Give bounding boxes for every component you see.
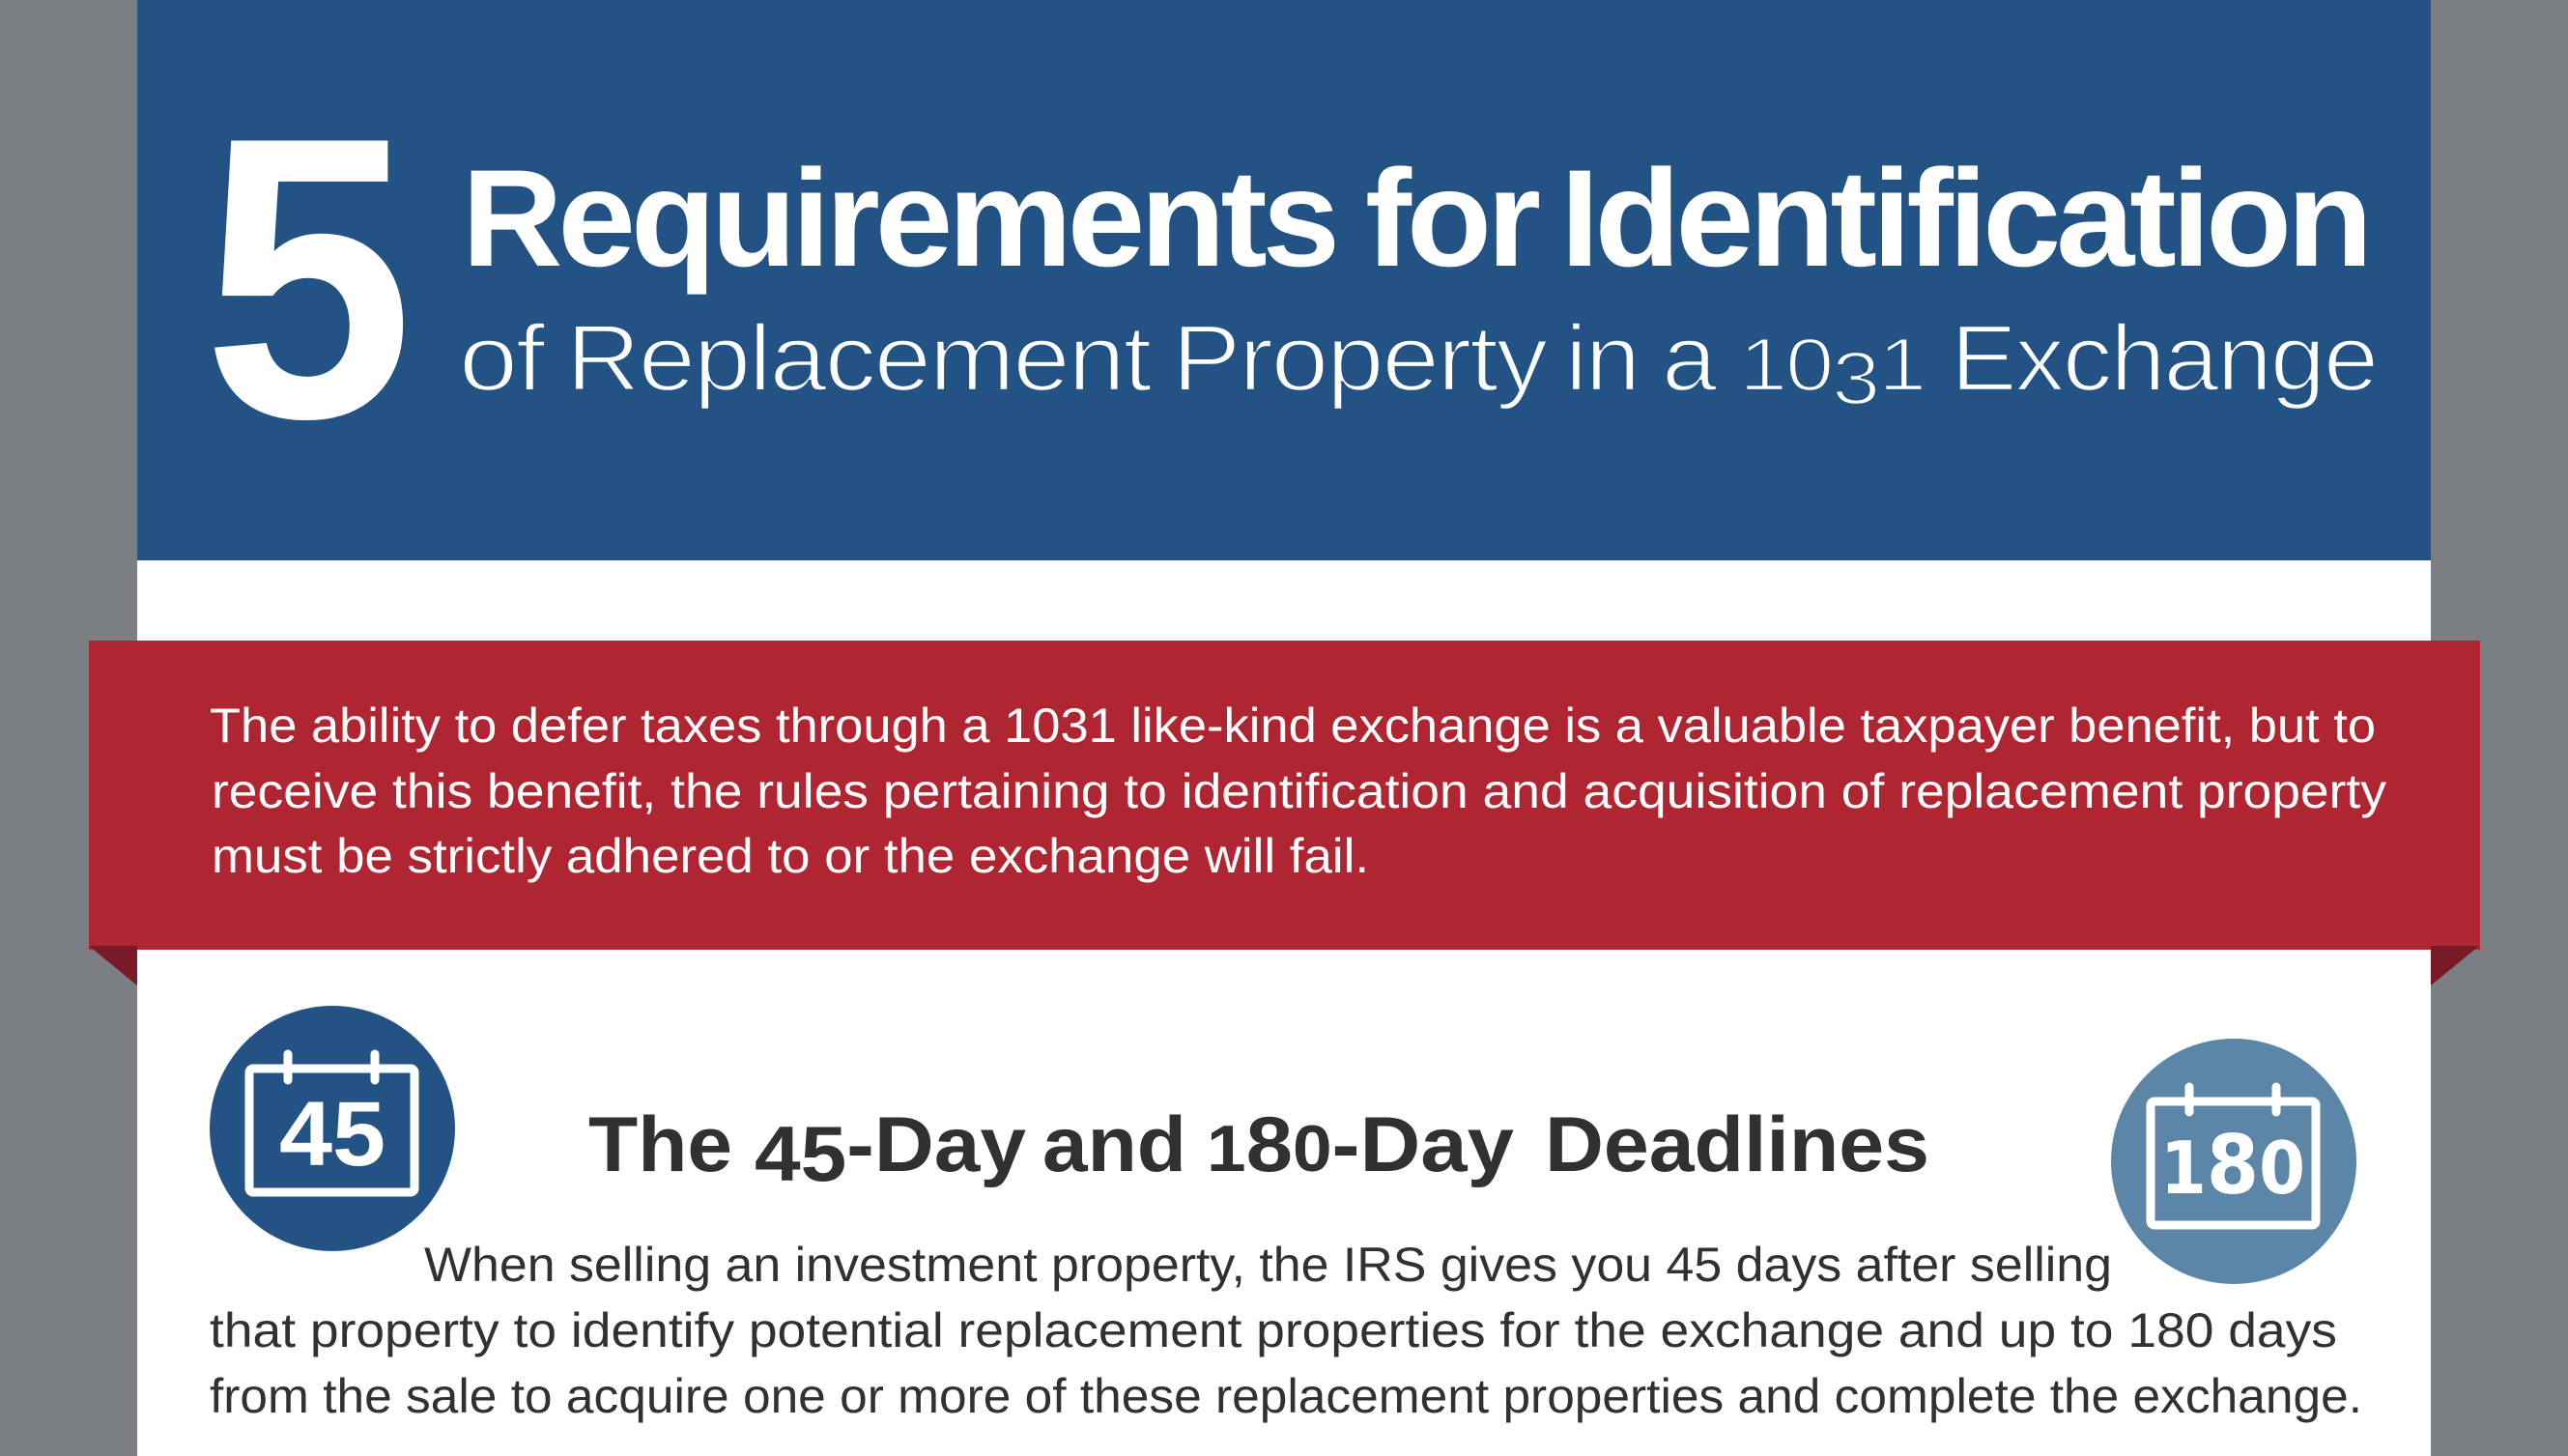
- intro text: receive this benefit, the rules pertaining to identification and acquisition of replacement property: [212, 764, 2386, 818]
- title: [462, 142, 2368, 296]
- subtitle: Exchange: [1951, 305, 2377, 411]
- panel: header: [137, 0, 2431, 560]
- subtitle: Replacement: [566, 305, 1152, 411]
- section heading: 180-Day: [1207, 1101, 1514, 1188]
- section heading: -Day: [846, 1101, 1026, 1188]
- ribbon fold right: [2431, 946, 2479, 985]
- subtitle: of: [459, 305, 546, 411]
- title: for: [1365, 142, 1539, 296]
- section heading: and: [1042, 1101, 1186, 1188]
- icon: 45-day calendar: 45: [279, 1083, 385, 1185]
- intro text: must be strictly adhered to or the exchange will fail.: [212, 829, 1369, 883]
- intro text: The ability to defer taxes through a 1031 like-kind exchange is a valuable taxpayer benefit, but to: [210, 699, 2376, 753]
- body text: When selling an investment property, the IRS gives you 45 days after selling: [424, 1238, 2112, 1292]
- body text: that property to identify potential replacement properties for the exchange and up to 180 days: [210, 1303, 2337, 1357]
- section heading: Deadlines: [1545, 1101, 1929, 1188]
- body text: [210, 1238, 2362, 1423]
- big numeral 5: 5: [203, 53, 414, 501]
- subtitle: 10: [1739, 322, 1819, 407]
- subtitle: Property: [1172, 305, 1549, 411]
- icon: 180-day calendar: [2111, 1039, 2356, 1284]
- subtitle: [459, 305, 2377, 420]
- title: Requirements: [462, 142, 1335, 296]
- section heading: 45: [755, 1111, 846, 1198]
- title: Identification: [1560, 142, 2368, 296]
- subtitle: a: [1662, 305, 1717, 411]
- body text: from the sale to acquire one or more of these replacement properties and complete the exchange.: [210, 1369, 2362, 1423]
- icon: 45-day calendar: [210, 1006, 455, 1251]
- red ribbon banner: [89, 641, 2480, 985]
- subtitle: 1: [1878, 322, 1925, 407]
- ribbon fold left: [89, 946, 137, 985]
- subtitle: 3: [1832, 335, 1878, 420]
- section heading: [588, 1101, 1929, 1198]
- icon: 180-day calendar: 180: [2160, 1118, 2305, 1213]
- section heading: The: [588, 1101, 732, 1188]
- subtitle: in: [1565, 305, 1639, 411]
- intro text: [210, 699, 2386, 883]
